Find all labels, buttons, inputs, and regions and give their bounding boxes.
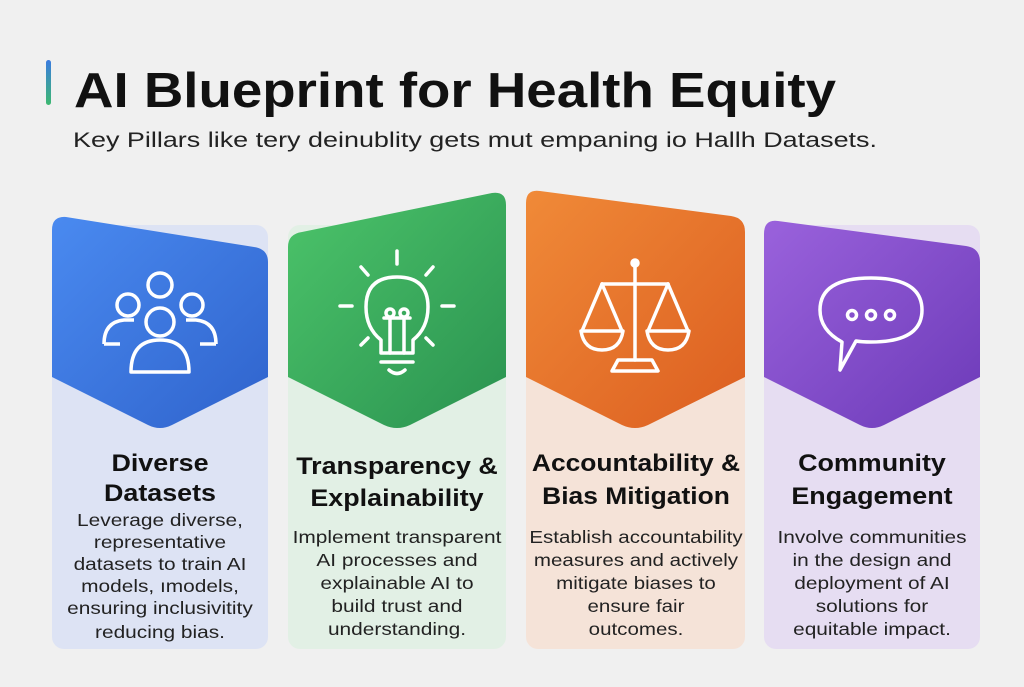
body text: representative	[94, 532, 226, 553]
heading: Community	[798, 450, 946, 477]
title accent bar	[46, 60, 51, 105]
body text: equitable impact.	[793, 619, 951, 640]
icon: speech bubble	[820, 278, 922, 370]
body text: Establish accountability	[529, 528, 743, 548]
icon: scales	[581, 260, 689, 371]
body text: models, ımodels,	[81, 576, 239, 597]
body text: deployment of AI	[794, 573, 950, 594]
heading: Transparency &	[296, 453, 498, 480]
body text: Implement transparent	[293, 527, 502, 548]
body text: AI processes and	[316, 550, 478, 571]
body text: solutions for	[816, 596, 929, 617]
body text: Involve communities	[777, 527, 967, 548]
heading: Engagement	[791, 483, 953, 510]
body text: mitigate biases to	[556, 574, 716, 594]
body text: ensure fair	[588, 597, 685, 617]
heading: Diverse	[111, 450, 209, 477]
body text: datasets to train AI	[74, 554, 246, 575]
panel: diverse datasets	[52, 217, 268, 649]
icon: people	[104, 273, 216, 372]
panel: accountability	[526, 191, 745, 649]
body text: build trust and	[331, 596, 463, 617]
body text: understanding.	[328, 619, 466, 640]
heading: Datasets	[104, 480, 216, 507]
panel: transparency	[288, 193, 506, 649]
body text: outcomes.	[589, 620, 683, 640]
body text: ensuring inclusivitity	[67, 598, 253, 619]
icon: light bulb	[340, 251, 454, 374]
body text: reducing bias.	[95, 622, 225, 643]
heading: Explainability	[310, 485, 484, 512]
body text: in the design and	[793, 550, 951, 571]
title: AI Blueprint for Health Equity	[74, 64, 836, 118]
heading: Accountability &	[532, 450, 740, 477]
panel: community	[764, 221, 980, 649]
heading: Bias Mitigation	[542, 483, 730, 510]
body text: explainable AI to	[320, 573, 474, 594]
subtitle: Key Pillars like tery deinublity gets mut empaning io Hallh Datasets.	[73, 129, 877, 152]
body text: Leverage diverse,	[77, 510, 243, 531]
body text: measures and actively	[534, 551, 738, 571]
